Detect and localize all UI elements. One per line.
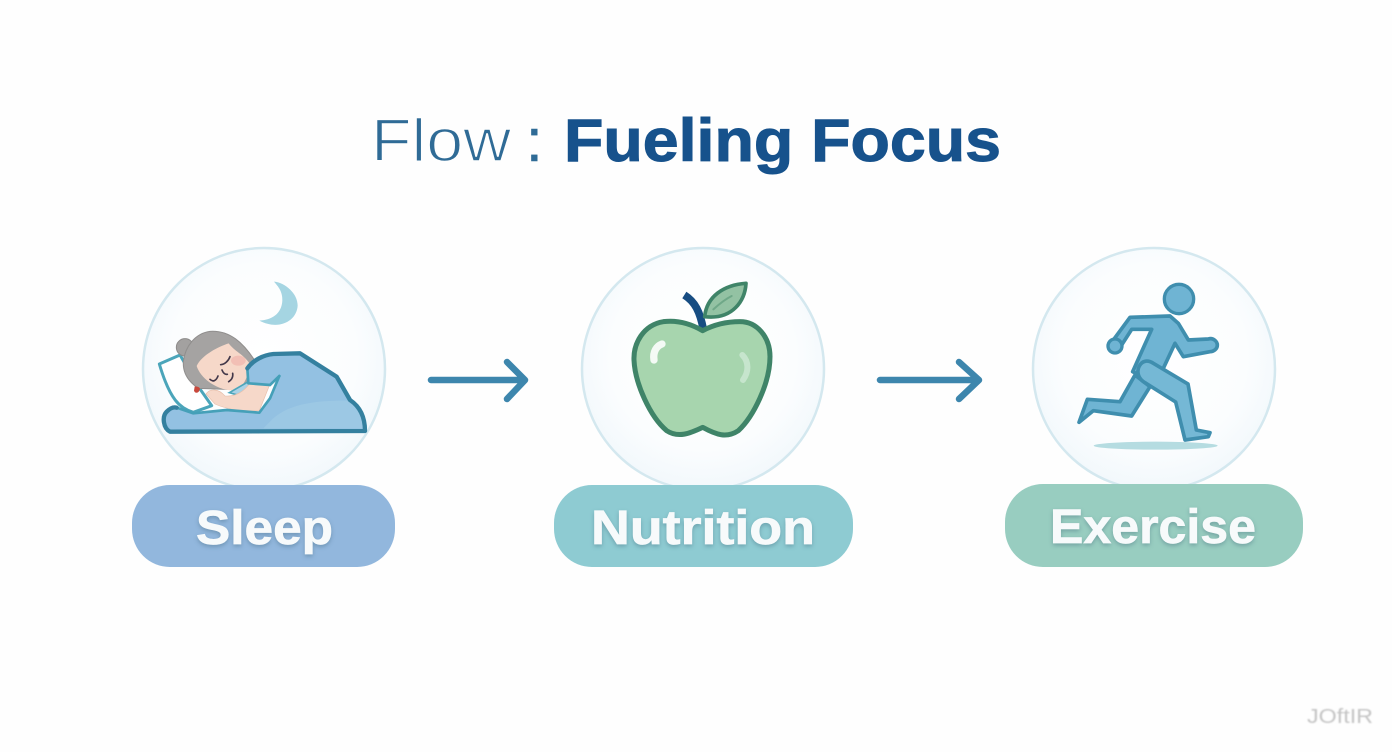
sleep label pill xyxy=(132,485,395,567)
exercise label pill: Exercise xyxy=(1050,501,1256,554)
arrow: nutrition to exercise xyxy=(880,362,979,399)
panel: sleep xyxy=(132,248,395,567)
icon: apple xyxy=(634,283,770,435)
title: Fueling Focus xyxy=(564,107,1001,174)
sleep circle xyxy=(143,248,385,490)
panel: exercise xyxy=(1005,248,1303,567)
nutrition label pill: Nutrition xyxy=(591,502,815,555)
icon: sleeping person with moon xyxy=(159,282,365,432)
nutrition label pill xyxy=(554,485,853,567)
sleep label pill: Sleep xyxy=(196,502,333,555)
panel: nutrition xyxy=(554,248,853,567)
arrow: sleep to nutrition xyxy=(431,362,525,399)
nutrition circle xyxy=(582,248,824,490)
exercise label pill xyxy=(1005,484,1303,567)
title: Flow xyxy=(371,107,512,174)
icon: runner xyxy=(1079,284,1218,450)
exercise circle xyxy=(1033,248,1275,490)
title xyxy=(371,107,1001,174)
watermark: JOftIR xyxy=(1307,706,1373,728)
title: : xyxy=(526,107,543,174)
